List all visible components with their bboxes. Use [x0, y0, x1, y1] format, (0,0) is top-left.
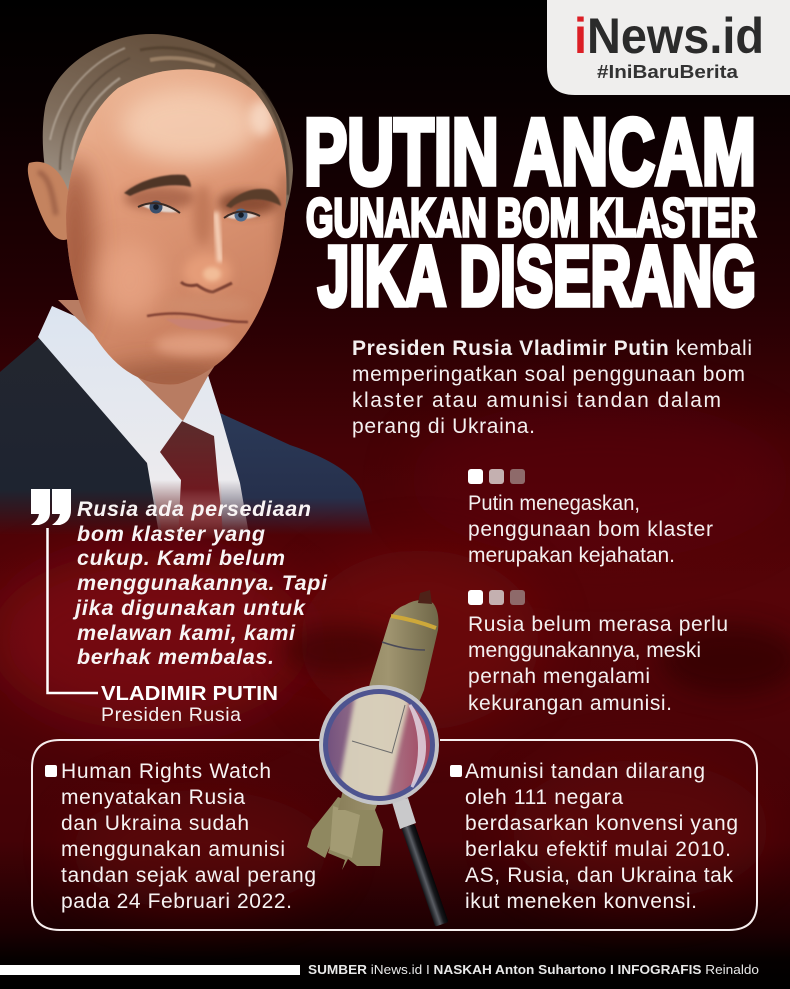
fact left text: tandan sejak awal perang [61, 864, 316, 887]
intro paragraph: Presiden Rusia Vladimir Putin kembali [352, 337, 752, 360]
necktie [160, 421, 224, 540]
ear inner [38, 172, 56, 215]
fact right text: berdasarkan konvensi yang [465, 812, 738, 835]
fact left text: pada 24 Februari 2022. [61, 890, 292, 913]
nose [183, 254, 231, 290]
quote text: cukup. Kami belum [77, 546, 285, 570]
bomb nose [418, 590, 432, 604]
bullet [450, 765, 462, 777]
quote block [31, 489, 328, 726]
tail fins [307, 797, 383, 870]
point 1 [468, 469, 713, 567]
neck [58, 300, 235, 421]
point 1 text: penggunaan bom klaster [468, 518, 713, 541]
quote text: bom klaster yang [77, 522, 265, 546]
magnifying glass [319, 680, 448, 927]
bottom facts panel outline [32, 740, 757, 930]
quote text: Rusia ada persediaan [77, 497, 311, 521]
quote block: Presiden Rusia [101, 704, 241, 726]
footer bar [0, 965, 300, 975]
fact right text [465, 760, 738, 913]
quote text: menggunakannya. Tapi [77, 571, 328, 595]
suit right [220, 413, 374, 540]
point 2 text: menggunakannya, meski [468, 639, 701, 662]
handle ferrule [392, 798, 416, 829]
fact right text: Amunisi tandan dilarang [465, 760, 705, 783]
portrait: Vladimir Putin [0, 34, 374, 545]
point 1 text: Putin menegaskan, [468, 492, 640, 515]
point 2 text: kekurangan amunisi. [468, 692, 672, 715]
handle shaft [401, 824, 448, 927]
eye socket shadows [124, 186, 196, 210]
lens highlight [410, 705, 425, 787]
point 2 text: pernah mengalami [468, 665, 650, 688]
point 2 text [468, 613, 728, 715]
fact left [45, 760, 316, 913]
hair [43, 34, 293, 235]
bullet dots [468, 469, 525, 484]
lens glass [328, 694, 430, 796]
quote connector line [48, 528, 98, 693]
logo badge [547, 0, 790, 95]
hair strands [50, 48, 288, 195]
intro paragraph: perang di Ukraina. [352, 415, 535, 438]
shirt [38, 306, 250, 540]
point 1 text [468, 492, 713, 567]
quote mark [31, 489, 71, 525]
mouth [147, 314, 248, 322]
quote attribution: VLADIMIR PUTIN [101, 682, 278, 705]
fact left text: dan Ukraina sudah [61, 812, 249, 835]
fact left text: Human Rights Watch [61, 760, 271, 783]
fact right text: ikut meneken konvensi. [465, 890, 697, 913]
intro paragraph: memperingatkan soal penggunaan bom [352, 363, 745, 386]
fact left text: menyatakan Rusia [61, 786, 245, 809]
intro paragraph [352, 337, 752, 438]
quote text [72, 497, 328, 669]
logo tagline: #IniBaruBerita [597, 62, 739, 82]
fin highlight [330, 806, 360, 858]
magnified bomb [338, 694, 410, 796]
bullet dots [468, 590, 525, 605]
fact left text: menggunakan amunisi [61, 838, 285, 861]
intro paragraph: klaster atau amunisi tandan dalam [352, 389, 721, 412]
point 2 text: Rusia belum merasa perlu [468, 613, 728, 636]
quote text: melawan kami, kami [77, 621, 296, 645]
face shading [55, 87, 295, 392]
ear [28, 162, 70, 240]
fact right [450, 760, 738, 913]
bullet [45, 765, 57, 777]
footer credits: SUMBER iNews.id I NASKAH Anton Suhartono I INFOGRAFIS Reinaldo [308, 962, 759, 977]
suit left [0, 333, 165, 545]
marking line [382, 642, 425, 650]
fact right text: AS, Rusia, dan Ukraina tak [465, 864, 734, 887]
point 2 [468, 590, 728, 715]
fact left text [61, 760, 316, 913]
face [66, 69, 286, 384]
yellow band [391, 616, 436, 628]
fact right text: berlaku efektif mulai 2010. [465, 838, 731, 861]
quote text: berhak membalas. [77, 645, 274, 669]
brows [124, 175, 191, 196]
eyes [142, 204, 178, 212]
point 1 text: merupakan kejahatan. [468, 544, 675, 567]
cluster bomb [307, 590, 438, 870]
title [304, 99, 756, 323]
fact right text: oleh 111 negara [465, 786, 623, 809]
logo wordmark: iNews.id [574, 8, 764, 64]
lens rim [319, 685, 439, 805]
bomb body [338, 600, 438, 810]
quote text: jika digunakan untuk [72, 596, 306, 620]
